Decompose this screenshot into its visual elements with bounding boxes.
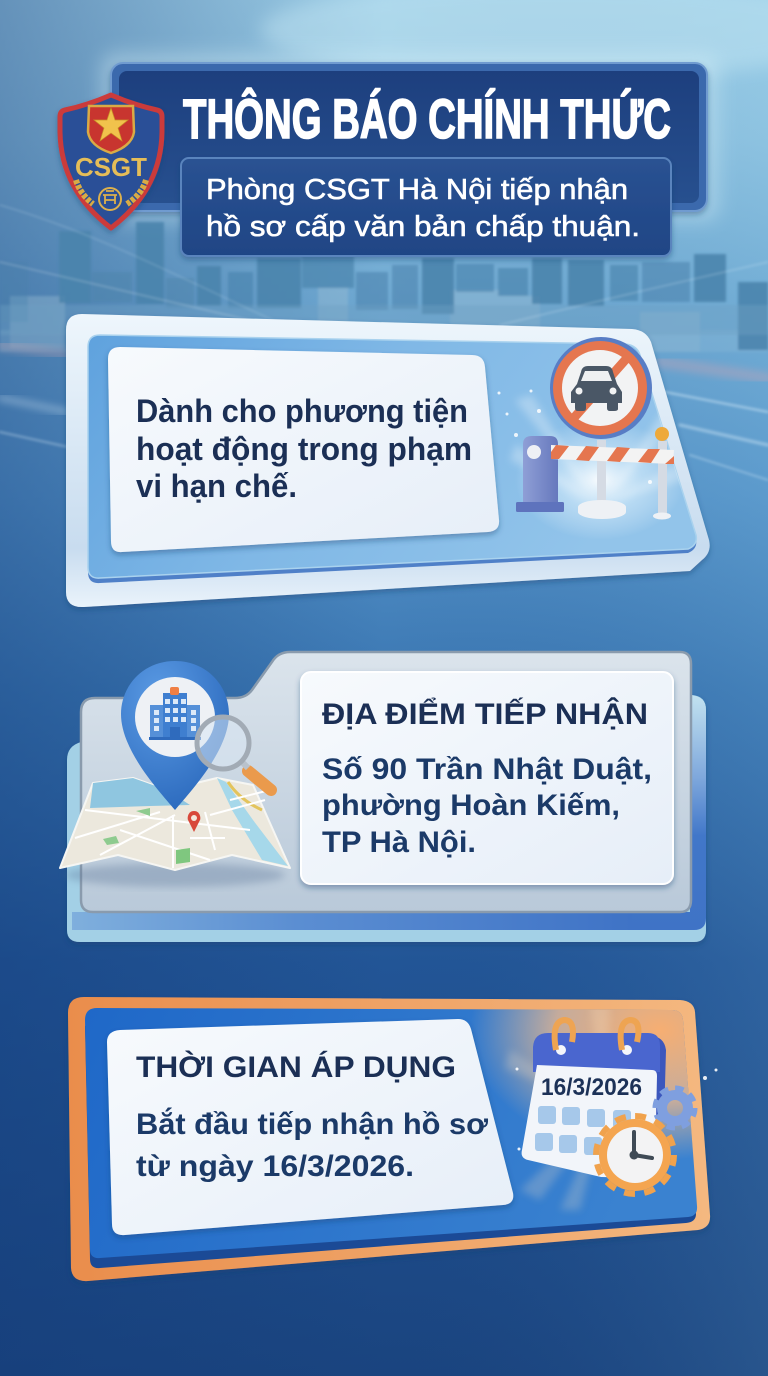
text panel bbox=[301, 672, 673, 884]
calendar page bbox=[522, 1065, 657, 1178]
card blue face bbox=[88, 335, 696, 578]
car bbox=[571, 366, 622, 411]
calendar day tiles bbox=[535, 1106, 631, 1155]
card blue edge bbox=[85, 1014, 696, 1268]
panel: reception location bbox=[60, 652, 706, 942]
card blue edge bbox=[88, 336, 696, 583]
small gear bbox=[655, 1088, 695, 1128]
icon: calendar and clock gear bbox=[516, 1020, 718, 1194]
hospital building bbox=[163, 693, 187, 738]
card orange frame bbox=[68, 997, 710, 1281]
text panel bbox=[108, 347, 499, 552]
header inner panel bbox=[119, 71, 699, 203]
magnifier bbox=[248, 771, 271, 790]
light streaks bbox=[0, 205, 768, 480]
text panel: TP Hà Nội. bbox=[322, 826, 476, 859]
card right edge bbox=[600, 695, 706, 930]
card back layer bbox=[67, 695, 706, 942]
header frame bbox=[111, 63, 707, 211]
text panel: Số 90 Trần Nhật Duật, bbox=[322, 753, 652, 786]
card front bbox=[81, 652, 691, 912]
card blue face bbox=[85, 1008, 697, 1258]
text panel: THỜI GIAN ÁP DỤNG bbox=[136, 1050, 456, 1084]
small red pin bbox=[188, 811, 200, 832]
text panel: ĐỊA ĐIỂM TIẾP NHẬN bbox=[322, 697, 648, 731]
icon: CSGT shield: CSGT bbox=[75, 152, 147, 182]
sparkles bbox=[498, 390, 652, 484]
card base bbox=[66, 314, 710, 607]
calendar back pages bbox=[650, 1036, 666, 1120]
icon: CSGT shield bbox=[60, 95, 162, 228]
icon: map with pin and magnifier bbox=[60, 661, 290, 887]
sparkles bbox=[516, 1068, 718, 1150]
calendar rings bbox=[556, 1045, 566, 1055]
icon: no-car sign and barrier bbox=[498, 337, 690, 540]
card bottom edge bbox=[72, 912, 632, 930]
text panel: phường Hoàn Kiếm, bbox=[322, 789, 620, 822]
card orange glow bbox=[475, 1010, 693, 1213]
panel: restricted area vehicles bbox=[66, 314, 710, 607]
city skyline bbox=[0, 222, 768, 352]
subtitle panel bbox=[181, 158, 671, 256]
barrier box bbox=[523, 436, 558, 502]
icon: calendar and clock gear: 16/3/2026 bbox=[541, 1074, 642, 1101]
text panel: Bắt đầu tiếp nhận hồ sơ bbox=[136, 1107, 489, 1141]
text panel bbox=[107, 1019, 513, 1235]
subtitle panel: hồ sơ cấp văn bản chấp thuận. bbox=[206, 211, 640, 243]
text panel: vi hạn chế. bbox=[136, 468, 297, 504]
clock gear bbox=[596, 1116, 674, 1194]
subtitle panel: Phòng CSGT Hà Nội tiếp nhận bbox=[206, 174, 628, 206]
header banner bbox=[111, 63, 707, 256]
location pin bbox=[121, 661, 229, 810]
right post bbox=[658, 441, 667, 514]
map bbox=[65, 863, 285, 887]
text panel: hoạt động trong phạm bbox=[136, 431, 472, 467]
calendar header bbox=[533, 1033, 660, 1072]
panel: application period bbox=[68, 997, 718, 1282]
barrier bar bbox=[551, 445, 674, 464]
text panel: từ ngày 16/3/2026. bbox=[136, 1150, 414, 1183]
sign disc bbox=[550, 337, 652, 439]
sign post bbox=[597, 440, 606, 506]
text panel: Dành cho phương tiện bbox=[136, 393, 468, 429]
